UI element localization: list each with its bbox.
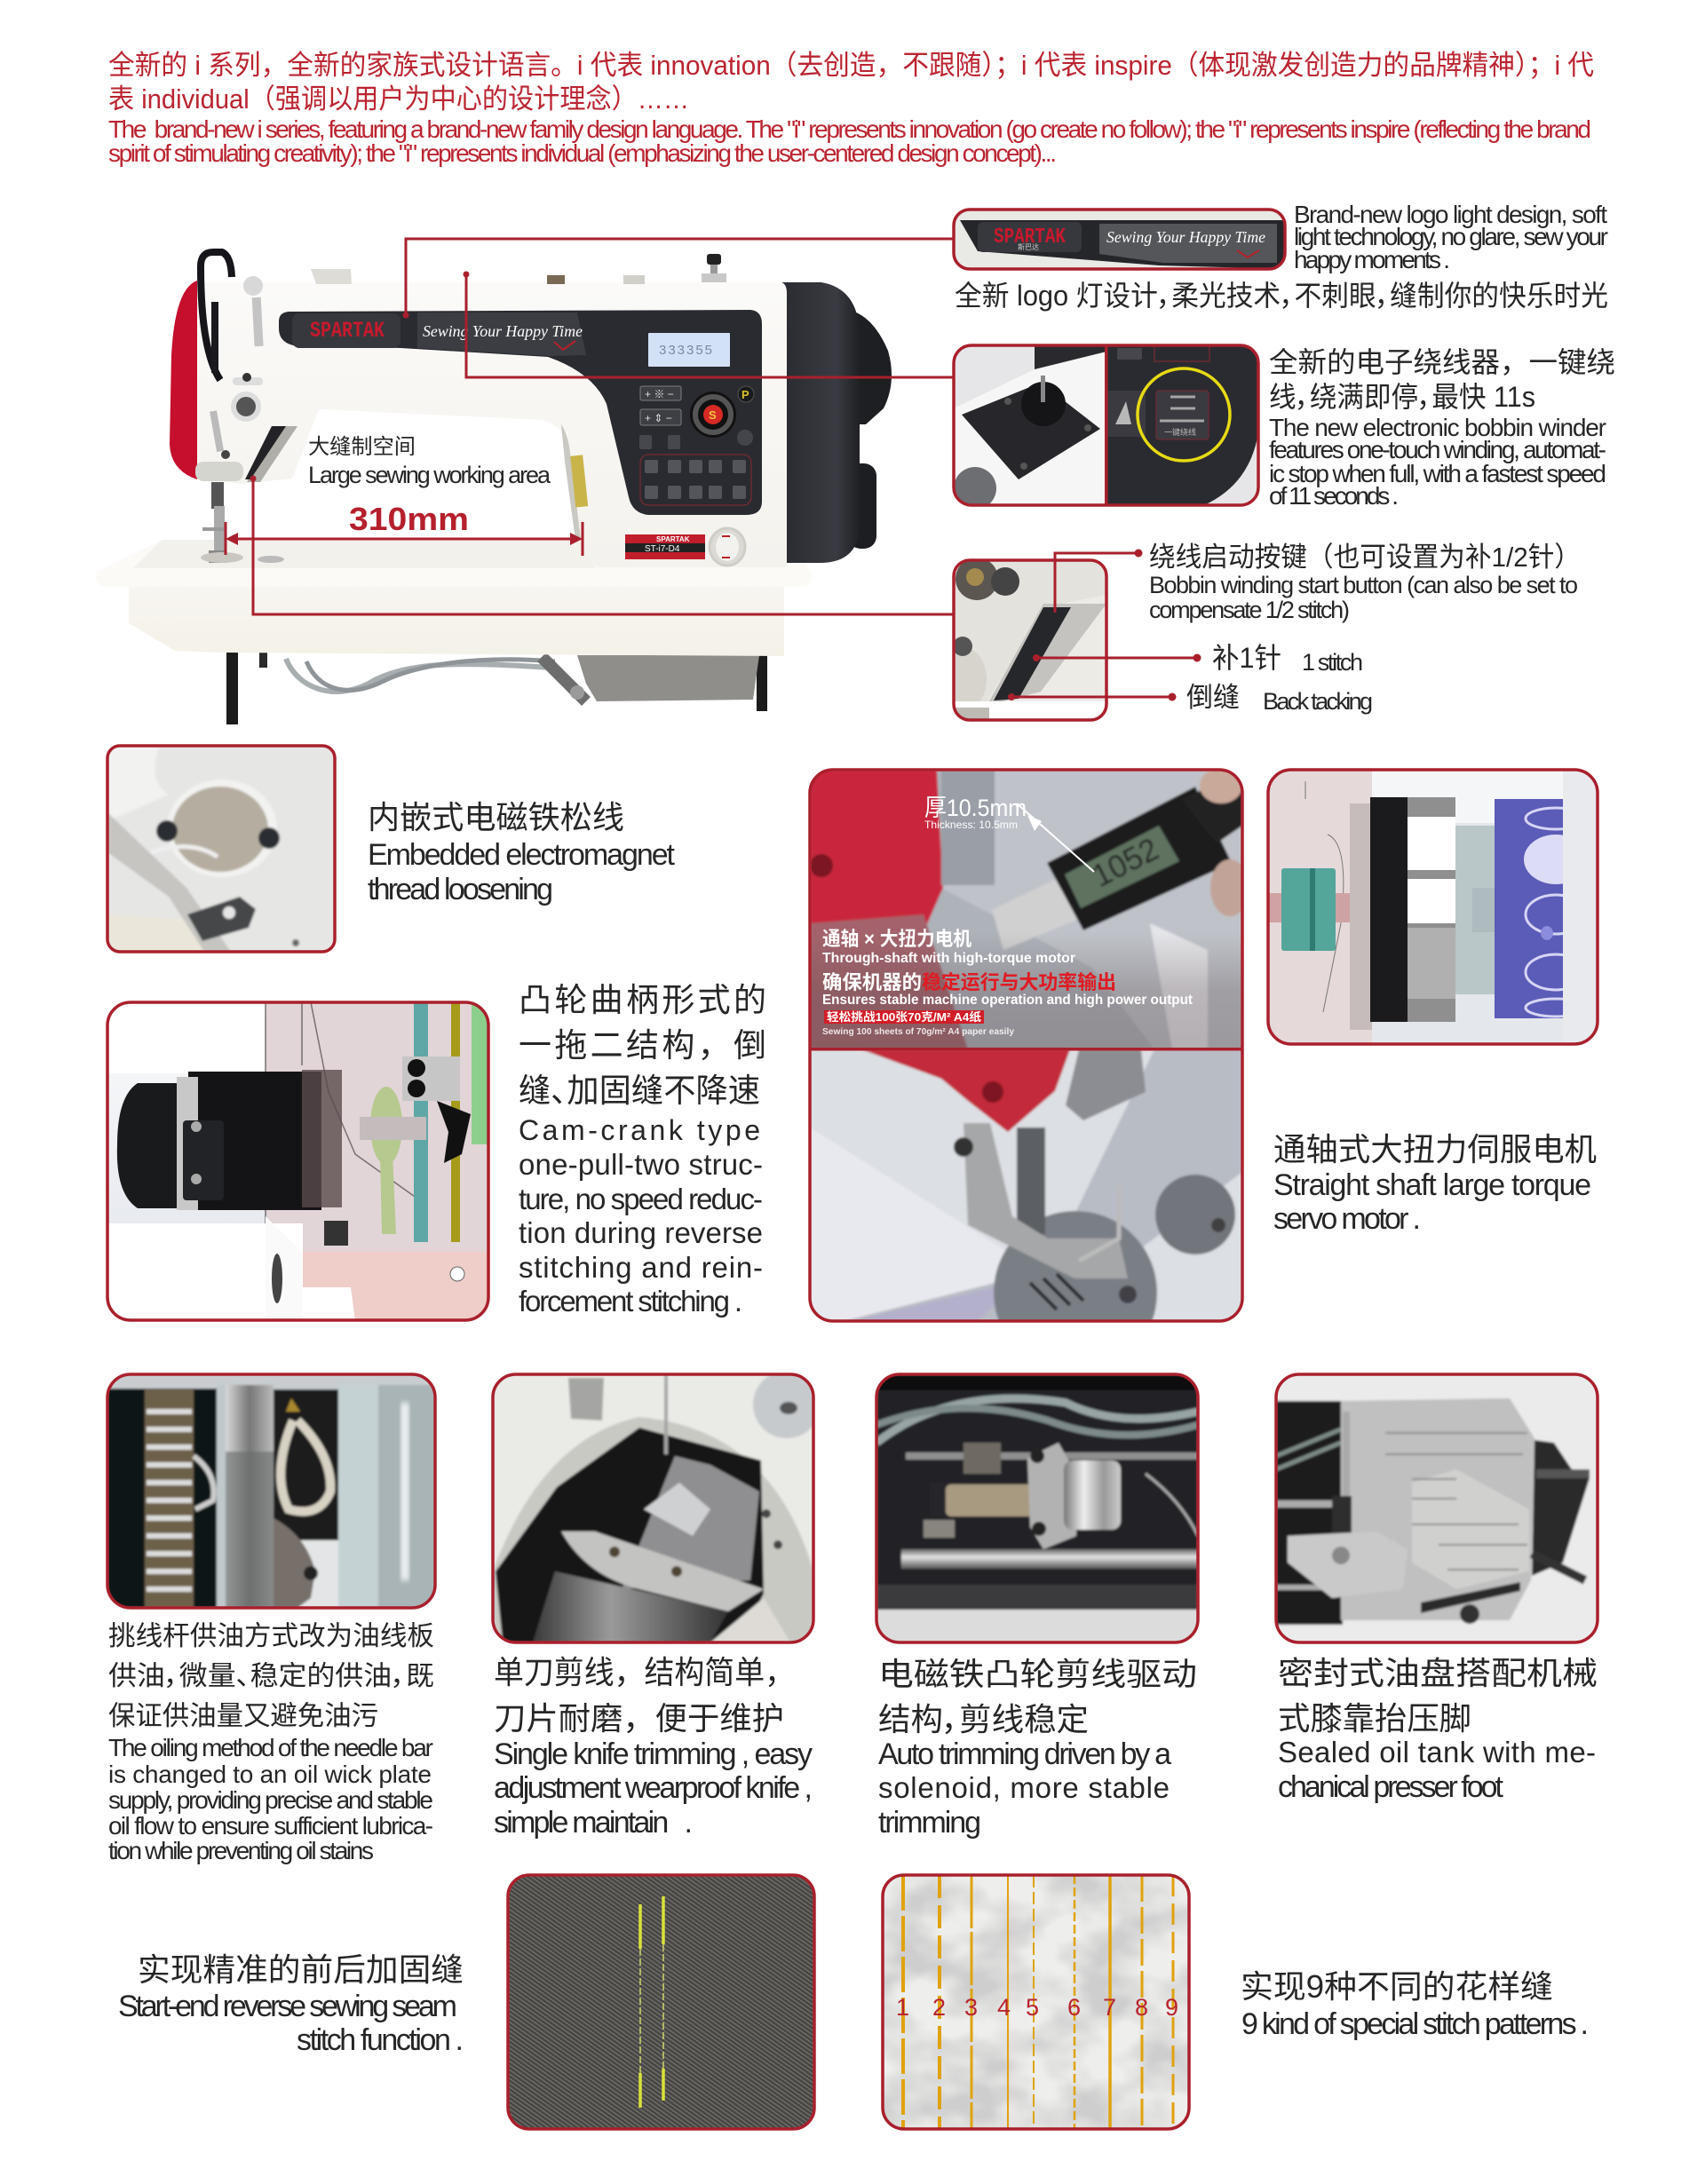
- text: solenoid trimming: solenoid, more stable: [878, 1771, 1170, 1804]
- control buttons: + ⇕ −: [645, 412, 672, 424]
- caliper photo: [810, 768, 1249, 1049]
- caliper overlay text: 通轴 × 大扭力电机: [822, 928, 971, 950]
- panel: bobbin winder inset: 一键绕线: [1164, 427, 1196, 437]
- panel: logo light inset: [954, 210, 1285, 269]
- text: servo motor: servo motor .: [1273, 1202, 1421, 1236]
- dimension: 310mm working area: [226, 501, 583, 556]
- caliper overlay text: Through-shaft with high-torque motor: [822, 951, 1075, 966]
- stitch numbers: 9: [1165, 1994, 1178, 2021]
- text: single knife trimming: Single knife trimming , easy: [494, 1737, 813, 1771]
- slogan on machine: Sewing Your Happy Time: [423, 322, 583, 340]
- rear black covers: [852, 312, 892, 424]
- callout: 1 stitch: 1 stitch: [1302, 649, 1363, 676]
- callout: bobbin winding start button: [1055, 542, 1581, 623]
- text: nine stitch patterns: 9 kind of special stitch patterns .: [1241, 2007, 1589, 2041]
- control buttons: [639, 386, 754, 505]
- text: bobbin winder description: [1269, 346, 1615, 510]
- text: reverse sewing seam: stitch function .: [297, 2023, 464, 2057]
- callout: bobbin winding start button: Bobbin winding start button (can also be set to: [1149, 572, 1578, 598]
- machine body: [197, 282, 787, 567]
- text: oil wick plate: 供油，微量、稳定的供油，既: [108, 1661, 434, 1691]
- LCD screen: [648, 333, 730, 367]
- brand text on machine: SPARTAK: [310, 318, 385, 344]
- text: bobbin winder description: of 11 seconds .: [1269, 482, 1399, 510]
- stitch numbers: 6: [1067, 1994, 1081, 2021]
- header: intro text: The brand-new i series, featuring a brand-new family design language. The "i" represents innovation (go create no follow); the "i" represents inspire (reflecting the brand: [108, 115, 1591, 143]
- text: cam-crank structure: 缝、加固缝不降速: [519, 1072, 760, 1109]
- header: intro text: [108, 50, 1594, 167]
- needle bar and presser foot: [201, 482, 284, 563]
- text: oil wick plate: supply, providing precise and stable: [108, 1786, 433, 1814]
- label: large sewing working area: 大缝制空间: [308, 435, 416, 459]
- text: oil wick plate: [108, 1621, 434, 1864]
- text: logo light description: Brand-new logo light design, soft: [1294, 201, 1607, 228]
- yellow warning label: [570, 455, 588, 508]
- panel: logo light inset: Sewing Your Happy Time: [1106, 228, 1265, 246]
- top fittings: [311, 254, 726, 284]
- LCD screen: 333355: [659, 343, 712, 358]
- text: embedded electromagnet: 内嵌式电磁铁松线: [368, 799, 624, 835]
- caliper overlay text: Ensures stable machine operation and high power output: [822, 993, 1194, 1008]
- text: servo motor: Straight shaft large torque: [1273, 1168, 1591, 1202]
- text: solenoid trimming: Auto trimming driven by a: [878, 1737, 1171, 1771]
- callout: bobbin winding start button: compensate 1/2 stitch): [1149, 597, 1350, 623]
- control buttons: P: [741, 388, 749, 401]
- text: nine stitch patterns: 实现9种不同的花样缝: [1241, 1968, 1553, 2005]
- control buttons: + ※ −: [645, 388, 674, 400]
- stitch numbers: 5: [1026, 1994, 1039, 2021]
- text: cam-crank structure: 一拖二结构，倒: [519, 1027, 766, 1064]
- text: nine stitch patterns: [1241, 1968, 1589, 2041]
- text: single knife trimming: simple maintain .: [494, 1806, 693, 1840]
- text: oil wick plate: The oiling method of the needle bar: [108, 1734, 433, 1761]
- text: embedded electromagnet: [368, 799, 676, 906]
- stitch numbers: 7: [1103, 1994, 1116, 2021]
- panel: sealed oil tank photo: [1276, 1374, 1598, 1642]
- panel: solenoid trimming photo: [876, 1374, 1198, 1642]
- stitch numbers: 3: [964, 1994, 978, 2021]
- table: [129, 582, 784, 656]
- sewing machine illustration: [96, 252, 892, 724]
- panel: denim reverse stitch sample: [508, 1875, 814, 2129]
- text: oil wick plate: oil flow to ensure sufficient lubrica-: [108, 1812, 433, 1840]
- stitch numbers: 8: [1135, 1994, 1148, 2021]
- text: reverse sewing seam: 实现精准的前后加固缝: [138, 1951, 464, 1988]
- label: large sewing working area: [308, 435, 551, 488]
- text: cam-crank structure: forcement stitching .: [519, 1285, 742, 1318]
- caliper overlay text: 确保机器的: [822, 971, 922, 993]
- panel: nine stitch patterns sample: [883, 1875, 1189, 2129]
- caliper overlay text: [822, 795, 1194, 1037]
- caliper overlay text: 厚10.5mm: [924, 795, 1027, 821]
- panel: bobbin winder inset: [954, 345, 1258, 510]
- text: bobbin winder description: features one-touch winding, automat-: [1269, 436, 1606, 463]
- text: reverse sewing seam: [118, 1951, 464, 2057]
- text: bobbin winder description: 全新的电子绕线器，一键绕: [1269, 346, 1615, 378]
- stitch numbers: 4: [997, 1994, 1011, 2021]
- text: cam-crank structure: Cam-crank type: [519, 1114, 760, 1146]
- text: oil wick plate: is changed to an oil wick plate: [108, 1761, 432, 1788]
- caliper overlay text: Sewing 100 sheets of 70g/m² A4 paper easily: [822, 1026, 1014, 1037]
- caliper photo: 1052: [1086, 830, 1164, 894]
- thread handle: [201, 252, 232, 380]
- callout: bobbin winding start button: 绕线启动按键（也可设置为补1/2针）: [1149, 542, 1581, 573]
- text: solenoid trimming: 结构，剪线稳定: [878, 1701, 1089, 1737]
- panel: through-shaft servo motor render: [1268, 770, 1598, 1044]
- stitch numbers: [898, 1998, 1178, 2015]
- text: sealed oil tank: 式膝靠抬压脚: [1278, 1700, 1471, 1737]
- text: cam-crank structure: [519, 982, 766, 1318]
- text: logo light description: happy moments .: [1294, 246, 1450, 273]
- text: oil wick plate: 保证供油量又避免油污: [108, 1701, 378, 1731]
- text: logo light description: 全新 logo 灯设计，柔光技术，不刺眼，缝制你的快乐时光: [955, 280, 1608, 312]
- text: bobbin winder description: 线，绕满即停，最快 11s: [1269, 381, 1535, 413]
- text: sealed oil tank: Sealed oil tank with me-: [1278, 1736, 1596, 1769]
- panel: oil wick photo: [107, 1374, 435, 1608]
- measuring arrow: [1017, 803, 1094, 872]
- panel: cam-crank structure render: [107, 1002, 488, 1321]
- label: large sewing working area: Large sewing working area: [308, 462, 551, 488]
- callout: 1 stitch: [1033, 642, 1363, 676]
- black control panel: [279, 310, 762, 515]
- text: logo light description: light technology, no glare, sew your: [1294, 223, 1608, 250]
- red front cover: [170, 281, 197, 479]
- text: solenoid trimming: 电磁铁凸轮剪线驱动: [878, 1656, 1197, 1692]
- caliper overlay text: Thickness: 10.5mm: [924, 819, 1018, 831]
- text: cam-crank structure: stitching and rein-: [519, 1251, 763, 1284]
- text: solenoid trimming: [878, 1656, 1197, 1840]
- caliper overlay text: 轻松挑战100张70克/M² A4纸: [827, 1010, 981, 1024]
- tension knobs: [195, 276, 264, 481]
- text: embedded electromagnet: thread loosening: [368, 873, 553, 906]
- panel: caliper and presser foot photo: [810, 768, 1249, 1374]
- text: embedded electromagnet: Embedded electromagnet: [368, 838, 676, 872]
- presser foot photo: [812, 1051, 1241, 1319]
- text: oil wick plate: tion while preventing oil stains: [108, 1837, 374, 1864]
- caliper overlay text: 稳定运行与大功率输出: [922, 971, 1116, 993]
- text: servo motor: [1273, 1131, 1597, 1236]
- stitch numbers: 1: [896, 1994, 909, 2021]
- panel: logo light inset: 斯巴达: [1018, 242, 1039, 251]
- text: cam-crank structure: 凸轮曲柄形式的: [519, 982, 766, 1018]
- inner arm shadow: [561, 424, 581, 540]
- text: sealed oil tank: [1278, 1655, 1598, 1804]
- text: reverse sewing seam: Start-end reverse sewing seam: [118, 1990, 457, 2023]
- header: intro text: 全新的 i 系列，全新的家族式设计语言。i 代表 innovation（去创造，不跟随）；i 代表 inspire（体现激发创造力的品牌精神）；i 代: [108, 50, 1594, 81]
- legs and tubing: [226, 636, 767, 724]
- header: intro text: 表 individual（强调以用户为中心的设计理念）……: [108, 83, 689, 115]
- callout: back tacking: 倒缝: [1186, 682, 1240, 713]
- text: oil wick plate: 挑线杆供油方式改为油线板: [108, 1621, 434, 1651]
- text: logo light description: [955, 201, 1608, 312]
- callout: back tacking: Back tacking: [1263, 688, 1373, 715]
- panel: embedded electromagnet photo: [107, 746, 335, 952]
- text: sealed oil tank: 密封式油盘搭配机械: [1278, 1655, 1598, 1691]
- side keys: [247, 426, 297, 482]
- panel: stitch keys inset: [940, 558, 1106, 720]
- text: sealed oil tank: chanical presser foot: [1278, 1770, 1504, 1804]
- model plate: [625, 534, 705, 559]
- text: cam-crank structure: one-pull-two struc-: [519, 1148, 763, 1181]
- stitch numbers: 2: [932, 1994, 946, 2021]
- text: solenoid trimming: trimming: [878, 1806, 981, 1840]
- panel: single knife trimming photo: [493, 1371, 821, 1642]
- header: intro text: spirit of stimulating creativity); the "i" represents individual (emphasizing the user-centered design concept)...: [108, 139, 1057, 167]
- text: bobbin winder description: ic stop when full, with a fastest speed: [1269, 460, 1606, 487]
- text: servo motor: 通轴式大扭力伺服电机: [1273, 1131, 1597, 1167]
- text: cam-crank structure: tion during reverse: [519, 1216, 763, 1249]
- text: single knife trimming: adjustment wearproof knife ,: [494, 1771, 813, 1805]
- panel: logo light inset: SPARTAK: [994, 226, 1066, 249]
- callout lines from machine to insets: [250, 239, 954, 614]
- control buttons: S: [709, 408, 717, 422]
- text: bobbin winder description: The new electronic bobbin winder: [1269, 414, 1606, 441]
- text: single knife trimming: [494, 1654, 813, 1840]
- text: single knife trimming: 单刀剪线，结构简单，: [494, 1654, 795, 1690]
- dimension: 310mm working area: 310mm: [349, 501, 469, 537]
- text: single knife trimming: 刀片耐磨，便于维护: [494, 1700, 784, 1737]
- callout: 1 stitch: 补1针: [1212, 642, 1281, 674]
- model plate: SPARTAK: [656, 535, 690, 543]
- callout: back tacking: [1008, 682, 1373, 715]
- text: cam-crank structure: ture, no speed reduc-: [519, 1183, 763, 1215]
- model plate: ST-i7-D4: [645, 544, 680, 554]
- oil gauge: [710, 528, 745, 566]
